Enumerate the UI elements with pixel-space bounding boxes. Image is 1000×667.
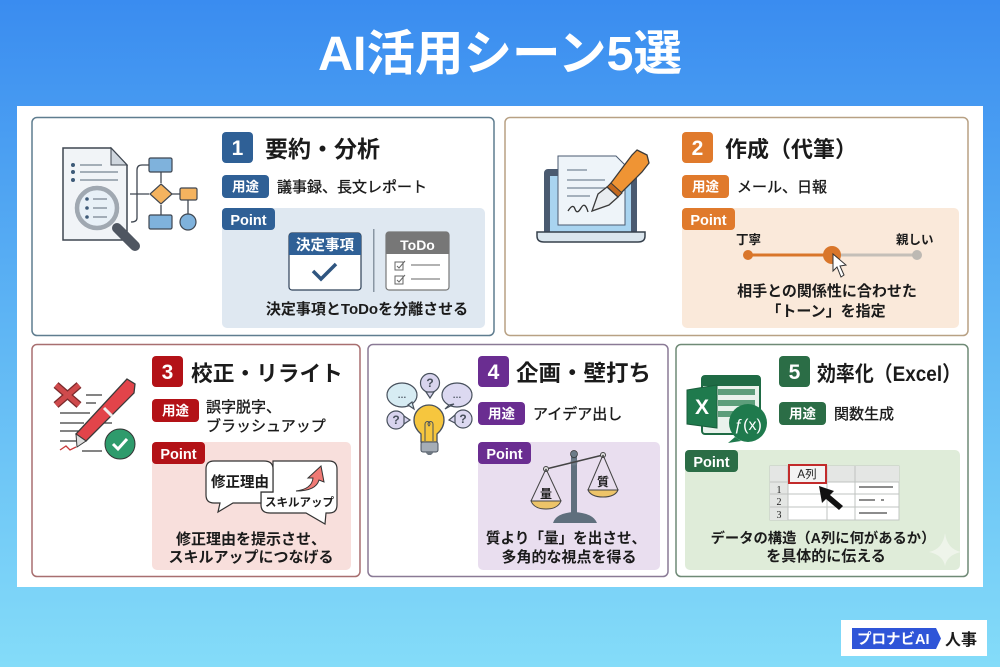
- usage text: 議事録、長文レポート: [277, 178, 427, 196]
- number badge 4: [478, 356, 509, 387]
- point box: Point: [693, 455, 730, 471]
- usage tag: [152, 399, 199, 422]
- point text: 修正理由を提示させ、: [176, 530, 326, 548]
- usage text: 誤字脱字、: [206, 399, 281, 416]
- logo: [841, 620, 987, 656]
- number badge 2: 2: [692, 137, 703, 160]
- spreadsheet: 3: [776, 510, 782, 521]
- heading: 要約・分析: [265, 136, 380, 162]
- point box: [685, 450, 961, 570]
- point box: Point: [160, 447, 197, 463]
- main white board: [17, 106, 983, 587]
- point box: 「トーン」を指定: [766, 302, 886, 320]
- speech bubbles: 修正理由: [211, 473, 269, 491]
- number badge 2: [682, 132, 713, 163]
- point box: [152, 442, 351, 570]
- point text: 質より「量」を出させ、: [486, 530, 646, 547]
- number badge 5: 5: [789, 361, 801, 384]
- number badge 1: [222, 132, 253, 163]
- heading: 効率化（Excel）: [817, 363, 961, 386]
- tone slider: 丁寧: [736, 232, 761, 247]
- tone slider: 親しい: [896, 232, 934, 247]
- usage text: アイデア出し: [533, 405, 622, 423]
- spreadsheet: [770, 465, 899, 521]
- point box: [682, 208, 959, 328]
- icon: lightbulb with bubbles: ?: [392, 413, 400, 427]
- number badge 5: [779, 356, 810, 387]
- panel: 4 brainstorming: [368, 344, 668, 576]
- point box: Point: [230, 213, 267, 229]
- usage tag: 用途: [232, 178, 259, 194]
- point box: [222, 208, 485, 328]
- logo: プロナビAI: [857, 630, 930, 648]
- point box: を具体的に伝える: [766, 547, 886, 565]
- point text: 決定事項とToDoを分離させる: [266, 300, 468, 318]
- icon: lightbulb with bubbles: …: [398, 390, 406, 400]
- icon: lightbulb with bubbles: ?: [459, 412, 467, 426]
- spreadsheet: 2: [776, 497, 782, 508]
- usage tag: [779, 402, 826, 425]
- number badge 1: 1: [232, 137, 244, 160]
- usage tag: 用途: [488, 406, 516, 422]
- point box: 多角的な視点を得る: [501, 548, 637, 566]
- point box: スキルアップにつなげる: [168, 549, 334, 566]
- number badge 3: [152, 356, 183, 387]
- point box: Point: [486, 447, 523, 463]
- spreadsheet: 1: [776, 485, 782, 496]
- usage tag: [682, 175, 729, 198]
- icon: red pen with marks: [56, 379, 135, 459]
- scale: 質: [597, 474, 609, 489]
- point text: データの構造（A列に何があるか）: [711, 529, 935, 547]
- logo: 人事: [945, 630, 977, 649]
- number badge 4: 4: [488, 361, 500, 384]
- decision card: [289, 233, 361, 290]
- icon: excel with function bubble: X: [695, 396, 709, 419]
- usage text: ブラッシュアップ: [206, 417, 326, 435]
- panel: 2 writing: [505, 118, 968, 336]
- icon: lightbulb with bubbles: …: [452, 390, 462, 400]
- icon: lightbulb with bubbles: [387, 374, 472, 455]
- panel: 1 summary and analysis: [32, 118, 494, 336]
- sparkle: [929, 533, 961, 566]
- panel: 5 efficiency excel: [676, 344, 968, 576]
- panel: 3 proofreading: [32, 344, 360, 576]
- point box: [478, 442, 660, 570]
- usage tag: [478, 402, 525, 425]
- scale: [531, 450, 618, 523]
- todo card: ToDo: [400, 237, 435, 253]
- heading: 作成（代筆）: [725, 137, 857, 162]
- scale: 量: [540, 487, 552, 501]
- usage text: [206, 399, 326, 435]
- point box: Point: [690, 213, 727, 229]
- speech bubbles: [206, 461, 337, 524]
- tone slider: [736, 232, 934, 277]
- icon: lightbulb with bubbles: ?: [426, 376, 434, 390]
- icon: excel with function bubble: ƒ(x): [734, 417, 762, 434]
- decision card: 決定事項: [296, 236, 354, 254]
- icon: laptop and pen: [537, 150, 649, 242]
- usage text: 関数生成: [834, 406, 894, 423]
- icon: document and flowchart: [63, 148, 197, 246]
- heading: 校正・リライト: [191, 361, 343, 386]
- usage text: メール、日報: [737, 179, 827, 196]
- speech bubbles: スキルアップ: [265, 496, 334, 509]
- todo card: [386, 232, 449, 290]
- usage tag: 用途: [692, 178, 720, 194]
- usage tag: 用途: [162, 402, 189, 418]
- heading: 企画・壁打ち: [516, 361, 651, 386]
- usage tag: 用途: [789, 406, 816, 422]
- usage tag: [222, 175, 269, 198]
- number badge 3: 3: [162, 361, 173, 384]
- point text: 相手との関係性に合わせた: [737, 283, 917, 300]
- title: AI活用シーン5選: [318, 27, 682, 81]
- spreadsheet: A列: [797, 468, 817, 481]
- icon: excel with function bubble: [687, 376, 767, 443]
